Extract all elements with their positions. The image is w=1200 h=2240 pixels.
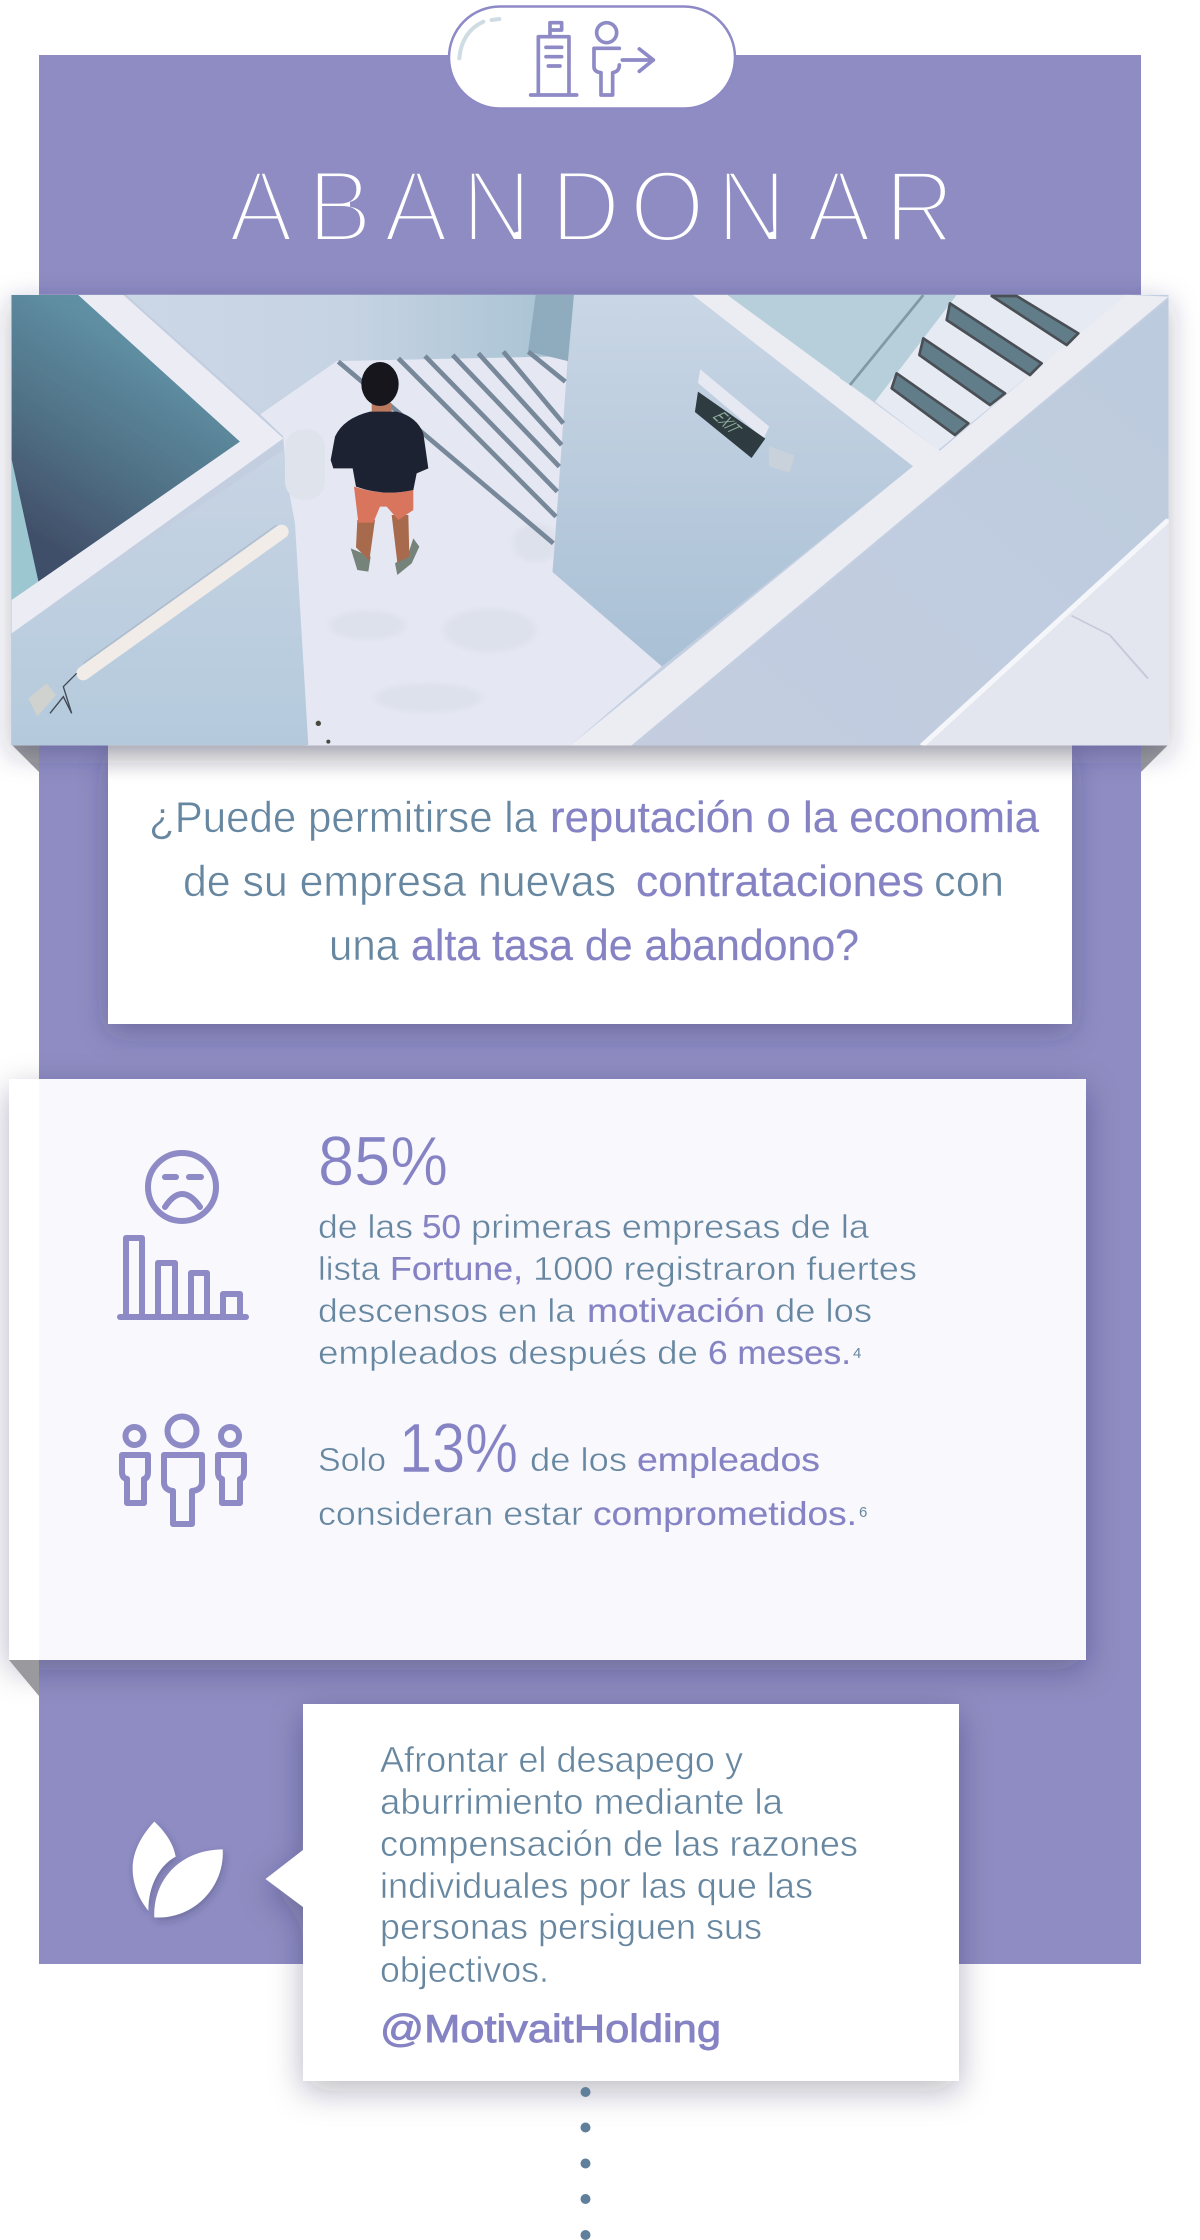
text: 85 percent description: 4 bbox=[853, 1345, 861, 1362]
text: 13 percent stat: empleados bbox=[637, 1441, 820, 1478]
panel: intro question card bbox=[108, 745, 1072, 1024]
text: 13 percent stat: comprometidos. bbox=[593, 1495, 857, 1532]
text: intro question: reputación o la economia bbox=[550, 793, 1040, 842]
text: 85 percent description: de los bbox=[775, 1292, 872, 1329]
text: intro question: alta tasa de abandono? bbox=[411, 921, 859, 970]
text: 85 percent description: lista bbox=[318, 1250, 381, 1287]
text: 85 percent description: motivación bbox=[587, 1292, 765, 1329]
text: intro question: de su empresa nuevas bbox=[183, 857, 616, 906]
person bbox=[331, 362, 428, 575]
text: 85 percent description: de las bbox=[318, 1208, 413, 1245]
photo detail: stairs and person bbox=[285, 352, 565, 575]
text: 85 percent description: empleados después de bbox=[318, 1334, 698, 1371]
text: quote body: compensación de las razones bbox=[380, 1823, 858, 1864]
text: 85 percent description: descensos en la bbox=[318, 1292, 576, 1329]
text: quote body: personas persiguen sus bbox=[380, 1906, 762, 1947]
text: 85 percent description: 50 bbox=[422, 1208, 461, 1245]
photo: person facing exit stairs: EXIT bbox=[707, 410, 746, 436]
photo: person facing exit stairs bbox=[11, 295, 1169, 745]
icon: white leaves bbox=[133, 1822, 223, 1917]
text: 13 percent stat bbox=[318, 1409, 867, 1532]
text: 13 percent stat: de los bbox=[530, 1441, 627, 1478]
skateboard bbox=[285, 429, 325, 500]
text: handle: @MotivaitHolding bbox=[380, 2008, 721, 2051]
text: 13 percent stat: consideran estar bbox=[318, 1495, 583, 1532]
text: quote body: aburrimiento mediante la bbox=[380, 1781, 784, 1822]
icon: declining bar chart bbox=[120, 1238, 246, 1317]
text: quote body: Afrontar el desapego y bbox=[380, 1739, 743, 1780]
text: intro question: una bbox=[329, 921, 399, 970]
text: intro question: contrataciones bbox=[636, 857, 924, 906]
exit sign bbox=[698, 369, 769, 439]
text: quote body: objectivos. bbox=[380, 1949, 549, 1990]
text: 85 percent description: Fortune, bbox=[390, 1250, 523, 1287]
text: intro question: ¿Puede permitirse la bbox=[149, 793, 538, 842]
text: intro question bbox=[149, 793, 1040, 970]
text: 13 percent stat: 13% bbox=[399, 1409, 518, 1487]
text: 85 percent description bbox=[318, 1208, 917, 1371]
text: quote body: individuales por las que las bbox=[380, 1865, 813, 1906]
text: 85 percent stat: 85% bbox=[318, 1122, 448, 1200]
photo detail: left wall and lamp bbox=[12, 295, 330, 745]
text: 85 percent description: 1000 registraron fuertes bbox=[533, 1250, 917, 1287]
text: quote body bbox=[380, 1739, 858, 1990]
title: ABANDONAR bbox=[228, 150, 954, 264]
photo detail: upper right stairs bbox=[840, 295, 1127, 450]
text: 85 percent description: primeras empresas de la bbox=[471, 1208, 870, 1245]
icon: card fold corner bbox=[9, 1660, 39, 1696]
icon: three people bbox=[122, 1416, 244, 1524]
icon: image fold corners bbox=[12, 745, 1168, 772]
panel: statistics card bbox=[9, 1079, 1086, 1696]
icon: sad face bbox=[148, 1153, 216, 1221]
dotted connector bbox=[580, 2087, 590, 2240]
panel: purple background bbox=[39, 55, 1141, 1964]
text: 13 percent stat: Solo bbox=[318, 1441, 386, 1478]
icon: exit pill badge bbox=[449, 6, 735, 108]
text: 13 percent stat: 6 bbox=[859, 1504, 867, 1521]
panel: quote speech bubble bbox=[266, 1704, 959, 2081]
text: 85 percent description: 6 meses. bbox=[708, 1334, 851, 1371]
text: intro question: con bbox=[934, 857, 1004, 906]
